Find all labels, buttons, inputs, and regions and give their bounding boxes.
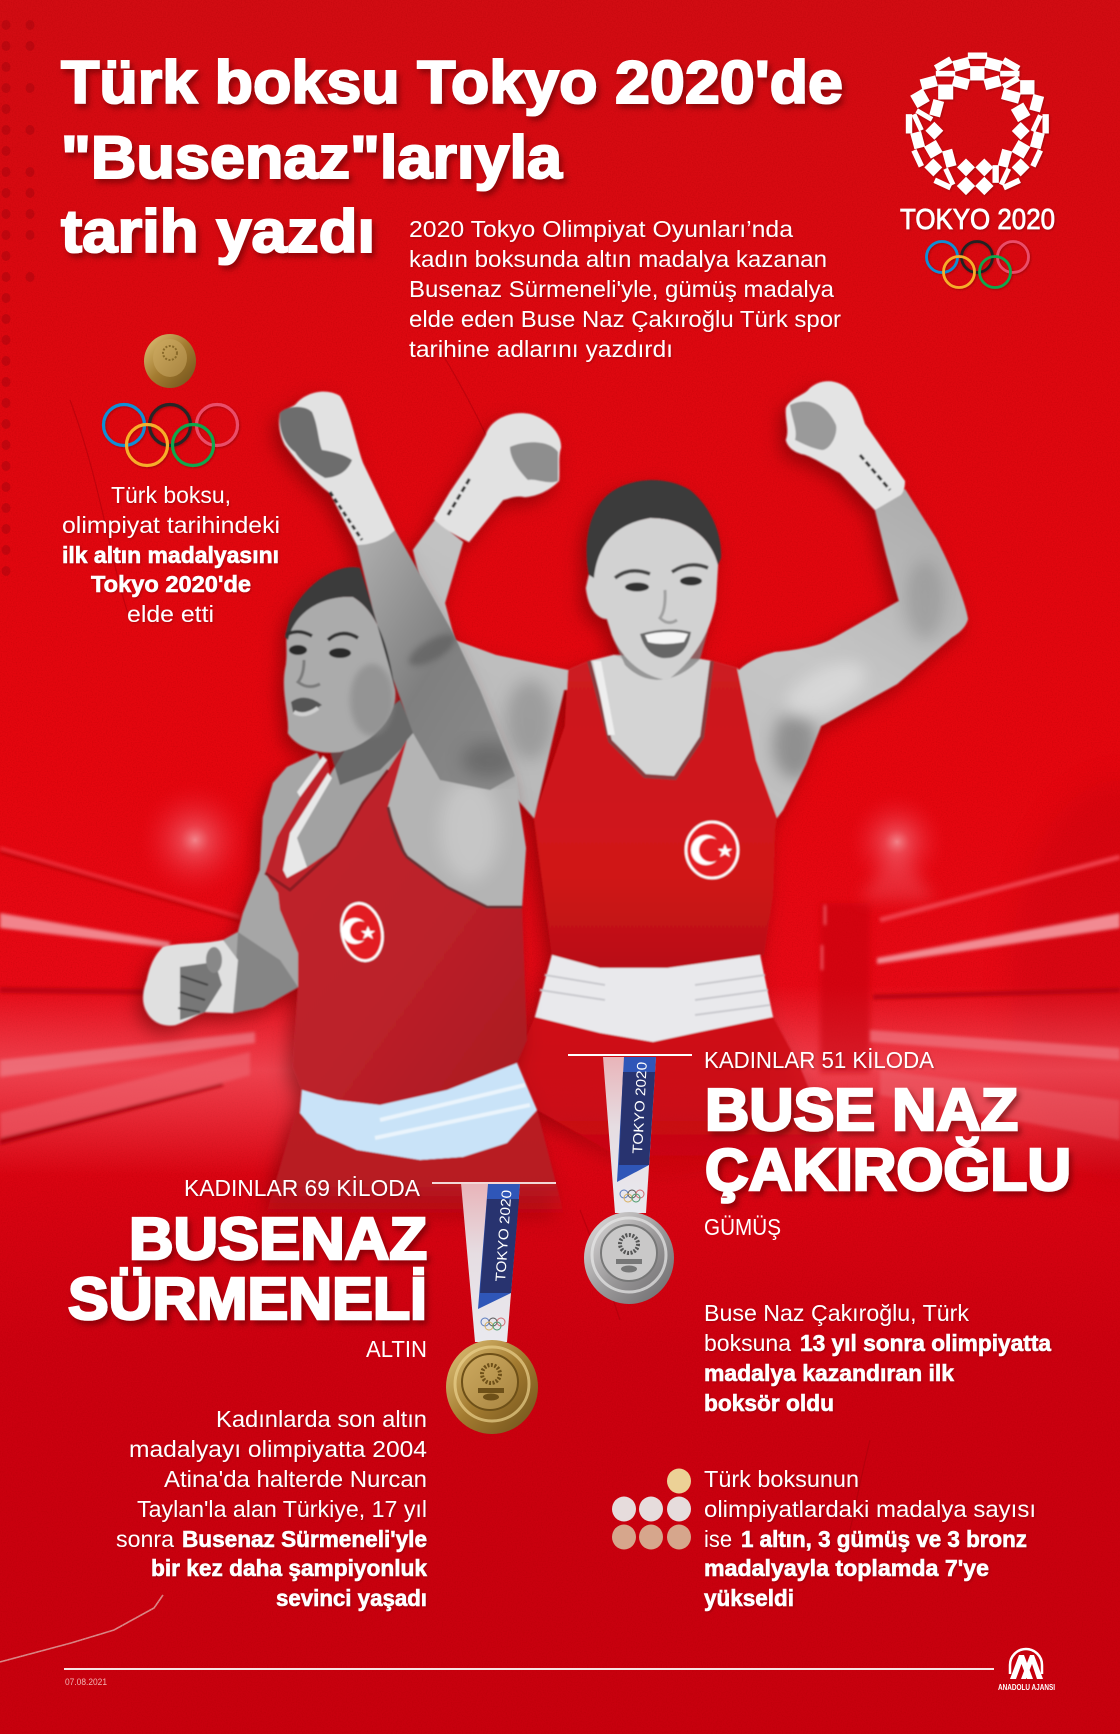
arms and shoulders xyxy=(413,489,968,818)
lower fist xyxy=(143,940,238,1025)
description: Busenaz Sürmeneli'yle xyxy=(182,1526,427,1552)
intro text: kadın boksunda altın madalya kazanan xyxy=(409,246,827,272)
gold history text: olimpiyat tarihindeki xyxy=(62,512,280,538)
eyes, brows, nose, mouth xyxy=(615,565,708,658)
intro text: Busenaz Sürmeneli'yle, gümüş madalya xyxy=(409,276,834,302)
light blue waistband xyxy=(300,1063,537,1160)
description: boksör oldu xyxy=(704,1390,834,1416)
left wrapped fist xyxy=(434,413,561,542)
face xyxy=(586,518,718,680)
title xyxy=(61,49,843,265)
white waistband xyxy=(535,955,773,1042)
athlete name: BUSENAZ xyxy=(129,1206,427,1272)
gold history text xyxy=(62,482,280,627)
right wrapped fist xyxy=(786,381,905,510)
description: Atina'da halterde Nurcan xyxy=(164,1466,427,1492)
gold ribbon and medal xyxy=(446,1183,538,1434)
description: 13 yıl sonra olimpiyatta xyxy=(800,1330,1051,1356)
medal count text xyxy=(704,1466,1036,1611)
silver ribbon and medal xyxy=(584,1057,674,1304)
vest xyxy=(265,740,527,1105)
date: 07.08.2021 xyxy=(65,1677,107,1687)
raised wrapped fist xyxy=(279,392,395,545)
neck and chest xyxy=(589,655,712,778)
spotlights xyxy=(137,782,947,900)
description: sonra xyxy=(116,1526,174,1552)
athlete name xyxy=(705,1077,1071,1203)
wrap writing xyxy=(448,455,890,515)
flag badge xyxy=(686,822,738,878)
olympic rings xyxy=(104,404,238,466)
gold history text: ilk altın madalyasını xyxy=(62,542,279,568)
neck and upper chest xyxy=(290,700,415,867)
description: madalyayı olimpiyatta 2004 xyxy=(129,1436,427,1462)
connector line xyxy=(432,1182,556,1184)
description xyxy=(116,1406,427,1611)
face xyxy=(284,597,395,753)
checker ring xyxy=(906,53,1048,194)
description: Kadınlarda son altın xyxy=(216,1406,427,1432)
athlete name: ÇAKIROĞLU xyxy=(705,1137,1071,1203)
lowered arm xyxy=(220,753,330,1013)
athlete name: BUSE NAZ xyxy=(705,1077,1018,1143)
medal count dots xyxy=(612,1468,691,1550)
flag badge xyxy=(336,899,388,965)
intro text: tarihine adlarını yazdırdı xyxy=(409,336,673,362)
medal count text: yükseldi xyxy=(704,1585,794,1611)
description: bir kez daha şampiyonluk xyxy=(151,1555,427,1581)
vest xyxy=(534,661,777,968)
gold history text: Türk boksu, xyxy=(111,482,231,508)
medal count text: olimpiyatlardaki madalya sayısı xyxy=(704,1496,1036,1522)
intro text: elde eden Buse Naz Çakıroğlu Türk spor xyxy=(409,306,841,332)
medal label: ALTIN xyxy=(366,1336,427,1362)
panel: Buse Naz Çakıroğlu xyxy=(568,1047,1071,1416)
description: madalya kazandıran ilk xyxy=(704,1360,954,1386)
title: tarih yazdı xyxy=(61,198,375,265)
medal label: GÜMÜŞ xyxy=(704,1214,781,1240)
shorts xyxy=(265,1110,565,1218)
medal count text: 1 altın, 3 gümüş ve 3 bronz xyxy=(741,1526,1027,1552)
panel: Busenaz Sürmeneli xyxy=(68,1175,556,1611)
hair xyxy=(285,567,395,690)
athlete name: SÜRMENELİ xyxy=(68,1266,427,1332)
medal count text: ise xyxy=(704,1526,732,1552)
intro text xyxy=(409,216,841,362)
raised arm xyxy=(357,530,515,790)
Anadolu Ajansi logo xyxy=(998,1649,1055,1692)
boxing ring backdrop xyxy=(0,848,1120,1175)
medal count text: Türk boksunun xyxy=(704,1466,859,1492)
description: Buse Naz Çakıroğlu, Türk xyxy=(704,1300,970,1326)
medal count text: madalyayla toplamda 7'ye xyxy=(704,1555,989,1581)
footer rule xyxy=(64,1668,994,1670)
category label: KADINLAR 69 KİLODA xyxy=(184,1175,421,1201)
silver ribbon and medal: TOKYO 2020 xyxy=(629,1061,650,1154)
arm shading xyxy=(506,560,945,779)
title: "Busenaz"larıyla xyxy=(61,124,563,191)
description: Taylan'la alan Türkiye, 17 yıl xyxy=(137,1496,427,1522)
title: Türk boksu Tokyo 2020'de xyxy=(61,49,843,116)
figure: Buse Naz Çakıroğlu xyxy=(413,381,968,1180)
category label: KADINLAR 51 KİLODA xyxy=(704,1047,935,1073)
Anadolu Ajansi logo: ANADOLU AJANSI xyxy=(998,1683,1055,1692)
gold history text: elde etti xyxy=(127,601,214,627)
small gold medal icon xyxy=(144,334,196,388)
intro text: 2020 Tokyo Olimpiyat Oyunları’nda xyxy=(409,216,793,242)
description: sevinci yaşadı xyxy=(276,1585,427,1611)
description xyxy=(704,1300,1051,1416)
Tokyo 2020 emblem xyxy=(900,53,1055,288)
gold ribbon and medal: TOKYO 2020 xyxy=(492,1189,514,1282)
hair xyxy=(587,480,721,578)
bra and strap trim xyxy=(283,773,332,878)
athlete name xyxy=(68,1206,427,1332)
description: boksuna xyxy=(704,1330,791,1356)
olympic rings xyxy=(926,242,1028,288)
shorts xyxy=(517,1017,830,1180)
figure: Busenaz Sürmeneli xyxy=(143,392,565,1218)
emblem wordmark: TOKYO 2020 xyxy=(900,204,1055,236)
eyes, brows, nose, mouth xyxy=(286,632,358,714)
connector line xyxy=(568,1054,692,1056)
chest xyxy=(388,730,526,907)
gold history text: Tokyo 2020'de xyxy=(91,571,251,597)
